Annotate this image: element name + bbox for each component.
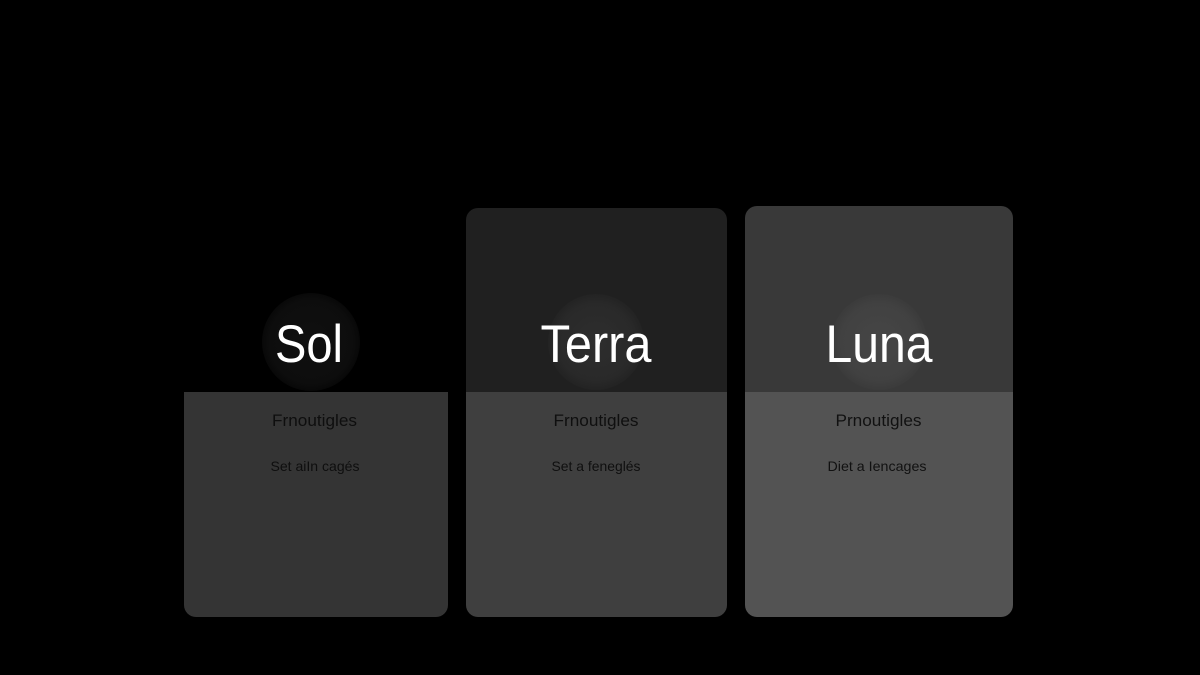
heading: Luna: Luna: [826, 315, 933, 374]
heading: Terra: Terra: [540, 315, 652, 374]
panel: Sol: [184, 293, 448, 617]
icon: Luna circle: [831, 294, 927, 390]
Terra upper card: [466, 208, 727, 393]
icon: Terra circle: [548, 294, 644, 390]
text: Sol description: Set aiIn cagés: [270, 458, 360, 474]
Luna upper card: [745, 206, 1013, 393]
panel: Terra: [466, 208, 727, 617]
icon: Sol circle: [262, 293, 360, 391]
panel: Luna: [745, 206, 1013, 617]
subheading: Luna: Prnoutigles: [836, 411, 922, 430]
subheading: Terra: Frnoutigles: [554, 411, 638, 430]
text: Luna description: Diet a Iencages: [828, 458, 926, 474]
Sol lower card: [184, 392, 448, 617]
Terra lower card: [466, 392, 727, 617]
heading: Sol: Sol: [275, 315, 343, 374]
text: Terra description: Set a feneglés: [552, 458, 640, 474]
Luna lower card: [745, 392, 1013, 617]
subheading: Sol: Frnoutigles: [272, 411, 357, 430]
